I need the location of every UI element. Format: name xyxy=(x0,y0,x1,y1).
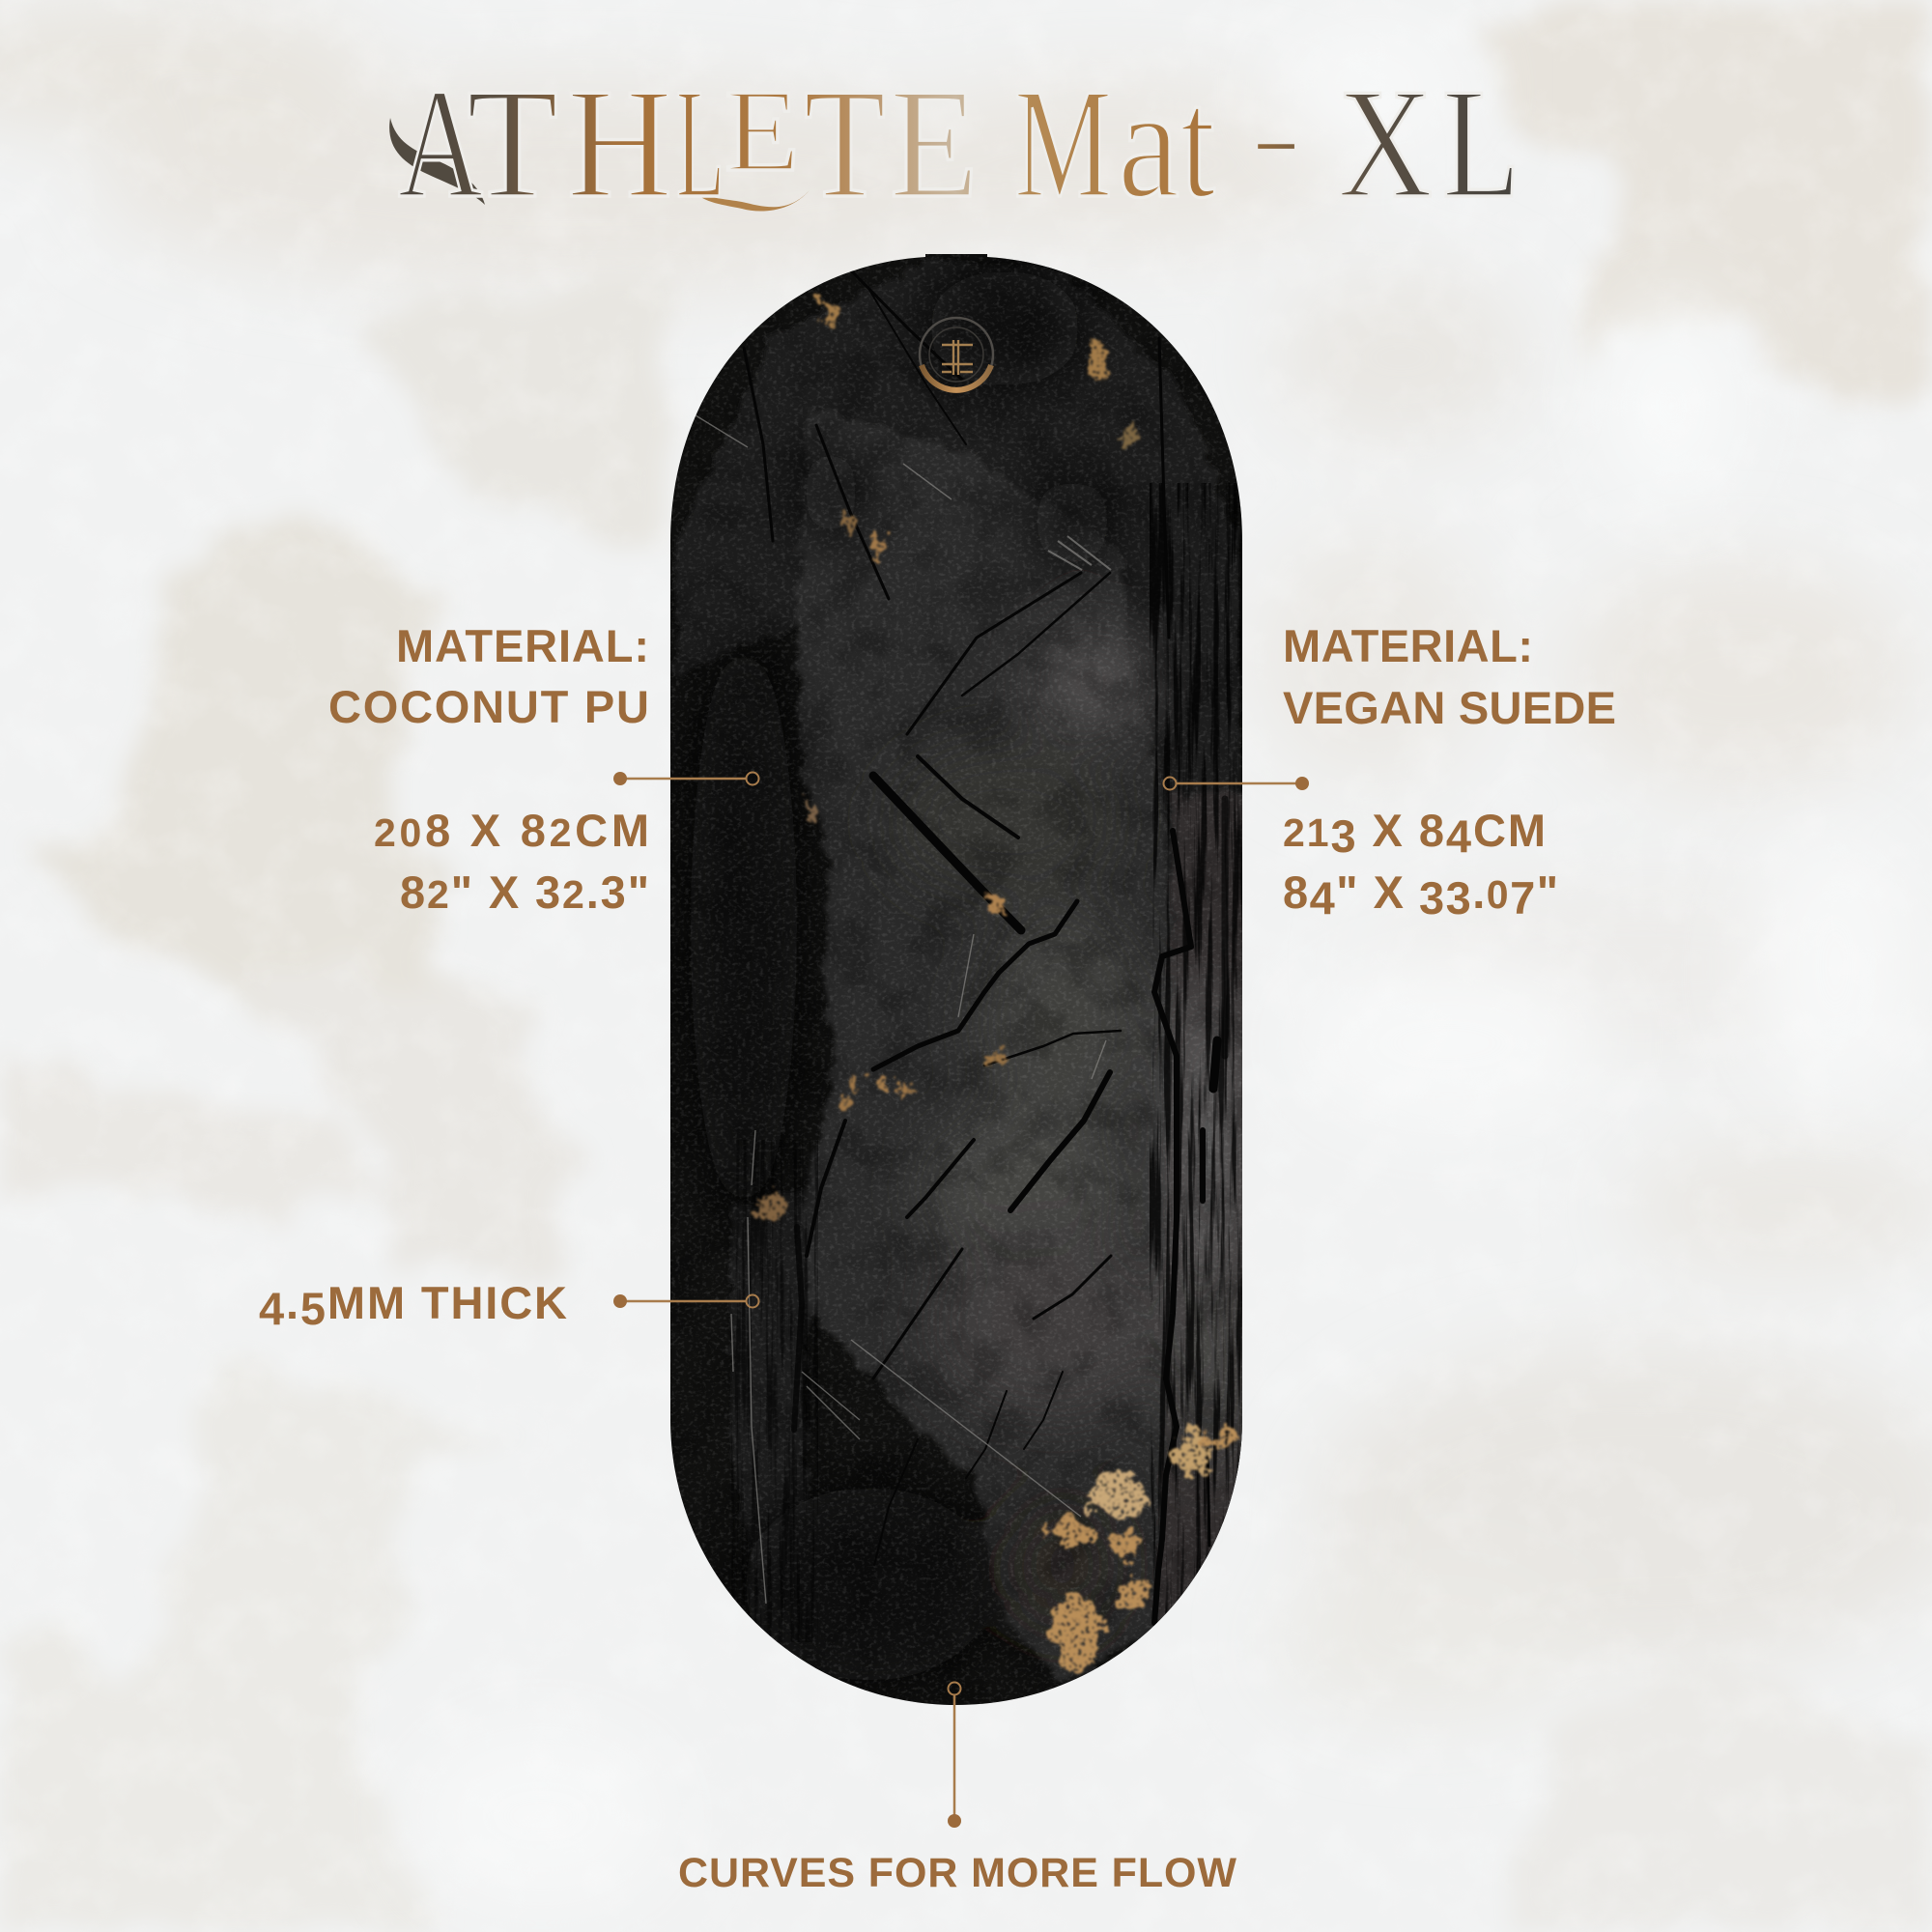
cracks xyxy=(744,270,1225,1623)
callout: top material connector xyxy=(1163,777,1309,790)
callout: curve connector xyxy=(948,1683,961,1828)
tonal light and shadow xyxy=(691,270,1242,1681)
label: top material and size: 4 xyxy=(1446,810,1471,862)
label: top material and size: 7 xyxy=(1510,872,1535,923)
title: M xyxy=(1014,57,1112,231)
label: top material and size: 8 xyxy=(1283,867,1308,918)
label: thickness: . xyxy=(286,1277,298,1328)
label: back material and size: MATERIAL: xyxy=(396,620,649,671)
title: A xyxy=(398,57,483,231)
label: top material and size: 21 xyxy=(1283,810,1329,855)
title: H xyxy=(567,57,672,231)
title: X xyxy=(1338,57,1433,231)
label: top material and size: CM xyxy=(1473,805,1546,856)
gold flecks xyxy=(758,302,1236,1673)
callout: thickness connector xyxy=(613,1294,759,1308)
label: top material and size xyxy=(1283,620,1616,923)
label: top material and size: MATERIAL: xyxy=(1283,620,1533,671)
label: top material and size: " xyxy=(1537,867,1558,918)
title: L xyxy=(1442,57,1520,231)
panel: yoga mat xyxy=(657,242,1256,1719)
title: E xyxy=(890,57,979,231)
label: top material and size: 3 xyxy=(1330,810,1356,862)
title: T xyxy=(804,57,886,231)
label: thickness: MM THICK xyxy=(327,1277,567,1328)
label: top material and size: " X xyxy=(1336,867,1417,918)
light scratches xyxy=(696,415,1111,1604)
stone slab xyxy=(676,259,1246,1681)
label: top material and size: VEGAN SUEDE xyxy=(1283,682,1616,733)
label: top material and size: X 8 xyxy=(1358,805,1444,856)
label: thickness: 5 xyxy=(300,1283,326,1334)
label: back material and size xyxy=(328,620,649,918)
icon: round brand logo xyxy=(920,318,993,391)
title: T xyxy=(467,57,558,231)
title: a xyxy=(1118,57,1179,231)
title: E xyxy=(724,66,800,196)
callout: back material connector xyxy=(613,772,759,785)
label: top material and size: 0 xyxy=(1487,872,1509,917)
label: top material and size: 4 xyxy=(1310,872,1335,923)
label: top material and size: 33 xyxy=(1419,872,1471,923)
label: back material and size: COCONUT PU xyxy=(328,681,649,732)
label: thickness: 4 xyxy=(259,1283,284,1334)
title xyxy=(389,23,1520,231)
title: L xyxy=(676,57,724,231)
label: top material and size: . xyxy=(1472,867,1485,918)
label: back material and size: 82" X 32.3" xyxy=(400,867,649,918)
title: - xyxy=(1252,103,1300,178)
label: curves: CURVES FOR MORE FLOW xyxy=(678,1850,1236,1896)
title: t xyxy=(1180,57,1215,231)
label: back material and size: 208 X 82CM xyxy=(374,805,649,856)
